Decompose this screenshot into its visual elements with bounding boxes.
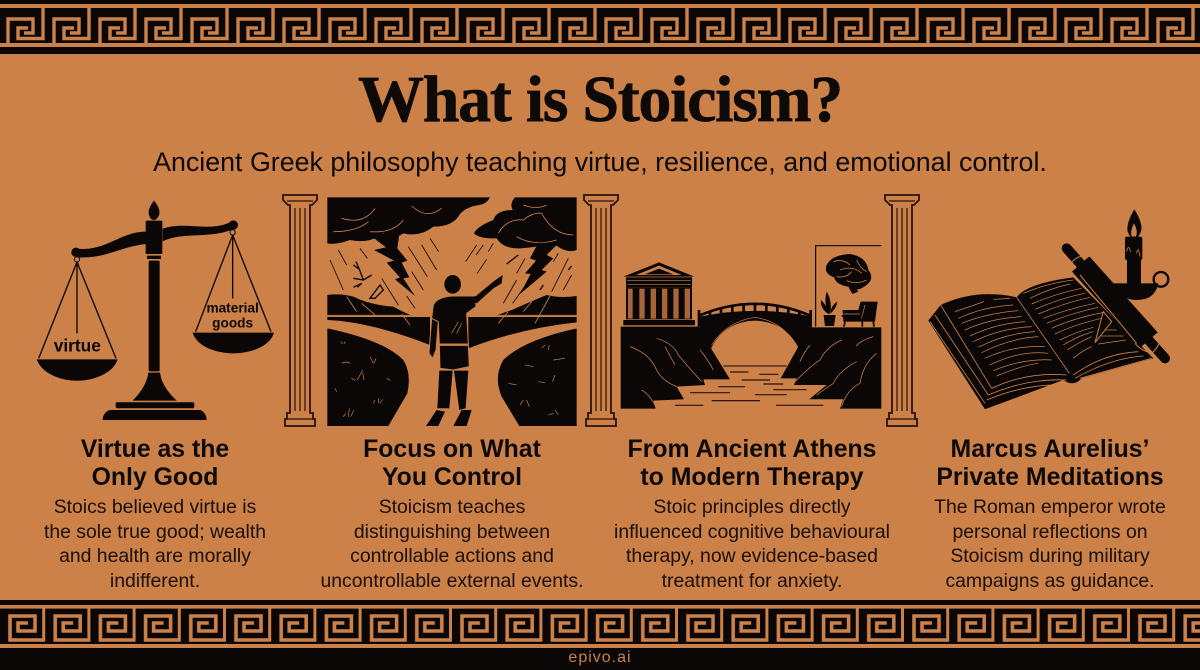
subtitle: Ancient Greek philosophy teaching virtue, resilience, and emotional control.: [153, 147, 1047, 177]
heading: control: Focus on What: [363, 436, 541, 463]
text: virtue: and health are morally: [59, 545, 251, 567]
heading: virtue: [81, 436, 229, 491]
text: virtue: indifferent.: [110, 570, 200, 592]
text: meditations: campaigns as guidance.: [945, 570, 1155, 592]
text: meditations: personal reflections on: [952, 521, 1148, 543]
heading: meditations: Marcus Aurelius’: [951, 436, 1149, 463]
column divider 1: [283, 195, 317, 426]
text: therapy: therapy, now evidence-based: [626, 545, 878, 567]
text: therapy: treatment for anxiety.: [662, 570, 842, 592]
heading: meditations: Private Meditations: [936, 464, 1164, 491]
text: virtue: the sole true good; wealth: [44, 521, 266, 543]
text: therapy: influenced cognitive behavioural: [614, 521, 890, 543]
heading: therapy: [628, 436, 876, 491]
text: control: [320, 496, 584, 592]
text: control: controllable actions and: [350, 545, 554, 567]
heading: therapy: From Ancient Athens: [628, 436, 876, 463]
illustration: open book, scroll and candle: [928, 209, 1168, 409]
footer brand: epivo.ai: [568, 649, 632, 666]
label: virtue: virtue: [54, 336, 101, 356]
text: meditations: Stoicism during military: [950, 545, 1150, 567]
label: material goods: material: [206, 301, 259, 316]
illustration: man at a crossroads under storm: [327, 197, 577, 426]
text: meditations: [934, 496, 1166, 592]
text: therapy: Stoic principles directly: [653, 496, 851, 518]
text: therapy: [614, 496, 890, 592]
text: virtue: [44, 496, 266, 592]
heading: control: [363, 436, 541, 491]
top meander border: [0, 0, 1200, 54]
text: control: distinguishing between: [354, 521, 550, 543]
heading: virtue: Virtue as the: [81, 436, 229, 463]
illustration: bridge from Greek temple to modern therapy room: [621, 246, 881, 409]
heading: virtue: Only Good: [92, 464, 218, 491]
label: material goods: goods: [212, 315, 254, 330]
heading: meditations: [936, 436, 1164, 491]
heading: control: You Control: [382, 464, 522, 491]
bottom meander border and footer bar: [0, 600, 1200, 670]
text: control: Stoicism teaches: [379, 496, 525, 518]
column divider 3: [885, 195, 919, 426]
text: virtue: Stoics believed virtue is: [54, 496, 256, 518]
title: What is Stoicism?: [358, 63, 842, 136]
heading: therapy: to Modern Therapy: [640, 464, 864, 491]
text: meditations: The Roman emperor wrote: [934, 496, 1166, 518]
icon: balance scale: [37, 201, 274, 420]
text: control: uncontrollable external events.: [320, 570, 584, 592]
column divider 2: [584, 195, 618, 426]
